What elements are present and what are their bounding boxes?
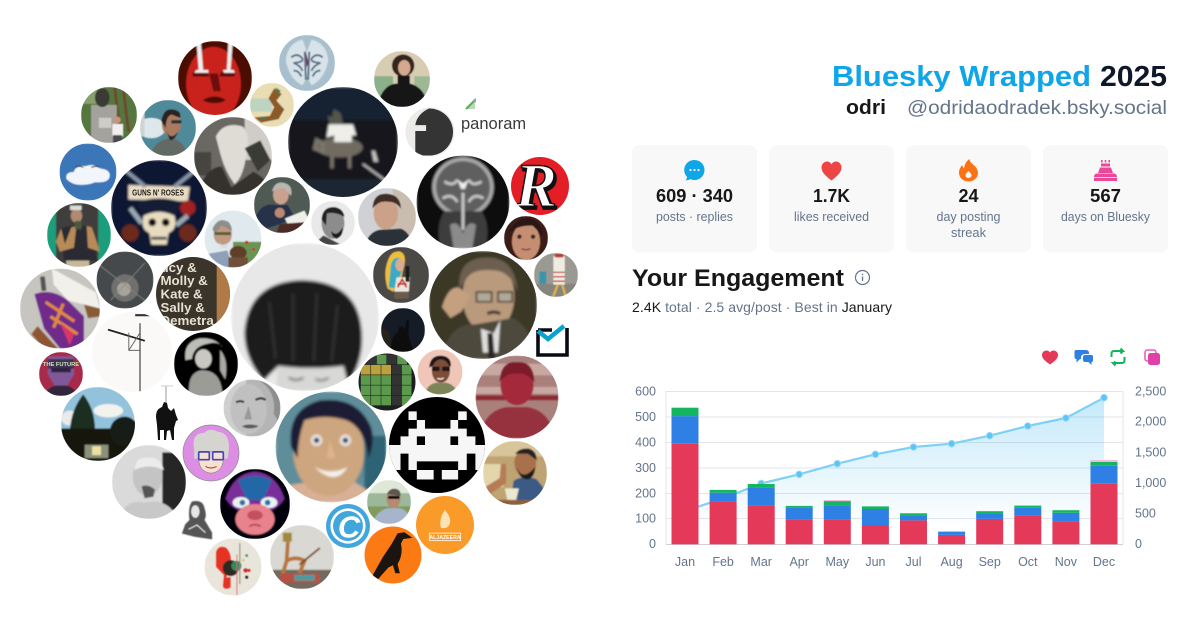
avatar: sailor toy on shelf (534, 253, 578, 297)
icon: info (856, 270, 870, 284)
avatar: night silhouette (381, 308, 425, 352)
avatar: woman in patterned dress (20, 268, 100, 348)
cumulative area (685, 398, 1104, 544)
avatar: Lucy & Molly text sign (152, 257, 230, 331)
engagement summary text: 2.4K total · 2.5 avg/post · Best in January (632, 299, 892, 315)
reposts bars (672, 408, 1118, 516)
icon: heart (822, 162, 842, 180)
avatar: red face with light beams (178, 41, 252, 121)
left axis labels: 500 (635, 410, 656, 424)
right axis labels: 2,500 (1135, 384, 1166, 398)
avatar: Guns N' Roses skull logo (111, 160, 207, 256)
avatar: Don Quixote silhouette (156, 386, 178, 440)
avatar: man reading a book (254, 177, 310, 233)
avatar: antenna on white (108, 314, 150, 392)
avatar: brain illustration (279, 35, 335, 91)
avatar: Madonna with anarchy shirt (373, 247, 429, 303)
month labels: Jun (865, 555, 886, 569)
month labels: Dec (1093, 555, 1115, 569)
avatar: marble statue on black (174, 332, 238, 396)
panel: posts and replies: posts · replies (656, 210, 733, 224)
avatar: mirror selfie on green (47, 203, 111, 267)
left axis labels: 300 (635, 461, 656, 475)
legend icons (1042, 348, 1160, 366)
left axis labels: 100 (635, 512, 656, 526)
cumulative line (685, 398, 1104, 511)
panel: likes received: 1.7K (813, 186, 850, 206)
avatar cluster (20, 35, 578, 596)
avatar: Al Jazeera orange logo: ALJAZEERA (429, 535, 461, 541)
line points (758, 394, 1107, 487)
replies bars (672, 416, 1118, 535)
avatar: young man (358, 188, 416, 246)
avatar: Lucy & Molly text sign: Sally & (160, 300, 205, 315)
month labels: Sep (979, 555, 1001, 569)
broken image icon and alt text (461, 98, 526, 133)
icon: legend like (1042, 350, 1058, 364)
left axis labels (635, 384, 656, 551)
avatar: The Future cartoon (39, 352, 83, 396)
icon: flame (959, 159, 978, 182)
icon: legend repost (1112, 348, 1124, 366)
panel: posts and replies (632, 145, 757, 252)
avatar: Wordle grid (358, 354, 416, 410)
avatar: crow on orange (364, 526, 422, 584)
right axis labels (1135, 384, 1166, 551)
left axis labels: 200 (635, 486, 656, 500)
month labels: Apr (789, 555, 809, 569)
avatar: blue C logo: C (338, 509, 361, 544)
avatar: guitar sculpture (270, 525, 334, 589)
avatar: red-tinted boy photo (476, 356, 558, 438)
avatar: blonde woman black and white (224, 380, 280, 436)
avatar: space invader (389, 397, 485, 493)
avatar: blue C logo (326, 504, 370, 548)
avatar: red R logo: R (514, 150, 557, 220)
month labels: May (825, 555, 850, 569)
panel: posts and replies: 609 · 340 (656, 186, 733, 206)
month labels: Aug (940, 555, 963, 569)
right axis labels: 0 (1135, 537, 1142, 551)
avatar: man at monument (81, 87, 137, 143)
month labels (675, 555, 1115, 569)
panel: likes received (769, 145, 894, 252)
user name and handle: @odridaodradek.bsky.social (907, 98, 1167, 119)
avatar: Lucy & Molly text sign: Kate & (160, 286, 203, 301)
avatar: bearded man at restaurant (483, 441, 547, 505)
avatar: cartoon man on purple (183, 425, 239, 481)
avatar: yellow painting with dragon (250, 83, 294, 127)
panel: days on Bluesky: 567 (1090, 186, 1121, 206)
icon: checkbox logo (538, 326, 567, 355)
user name and handle: odri (846, 97, 886, 119)
avatar: man with sunglasses and sky (137, 100, 196, 156)
panel: days on Bluesky (1043, 145, 1168, 252)
chart: monthly engagement (635, 384, 1166, 569)
title: 2025 (1100, 61, 1167, 93)
avatar: red R logo: R (516, 153, 559, 223)
panel: day posting streak: streak (951, 226, 987, 240)
broken image icon and alt text: panoram (461, 115, 526, 133)
right axis labels: 1,500 (1135, 446, 1166, 460)
avatar: big smiling man (276, 392, 386, 502)
heading: Your Engagement: Your Engagement (632, 265, 844, 292)
avatar: abstract red shapes on cream (204, 538, 262, 596)
month labels: Jan (675, 555, 695, 569)
avatar: man with dog and poppies (204, 210, 262, 268)
stacked bars (672, 408, 1118, 544)
month labels: Mar (750, 555, 772, 569)
avatar: Spinoza engraving (182, 501, 212, 539)
avatar: big black-haired woman portrait (231, 243, 379, 391)
icon: cake (1094, 160, 1117, 181)
avatar: red R logo (511, 157, 569, 215)
avatar: letter f half circle logo (406, 108, 454, 156)
panel: day posting streak (906, 145, 1031, 252)
panel: likes received: likes received (794, 210, 869, 224)
avatar: masked pig cartoon (220, 469, 290, 539)
avatar: Magritte house and tree (61, 387, 139, 461)
right axis labels: 500 (1135, 506, 1156, 520)
avatar: bespectacled man from film (429, 251, 537, 359)
avatar: Lucy & Molly text sign: Demetra (160, 313, 214, 328)
avatar: The Future cartoon: THE FUTURE (43, 362, 79, 368)
quotes bars (824, 460, 1118, 501)
avatar: woman with glasses on pink (418, 350, 462, 394)
avatar: Lucy & Molly text sign: Lucy & (152, 260, 197, 275)
avatar: girl close-up face (504, 216, 548, 260)
panel: day posting streak: 24 (958, 186, 978, 206)
month labels: Jul (906, 555, 921, 569)
avatar: old man black and white (112, 445, 186, 519)
icon: chat bubble (684, 160, 705, 180)
avatar: cloud with eyes (60, 144, 116, 200)
icon: legend replies (1074, 350, 1093, 365)
title: Bluesky Wrapped (832, 61, 1091, 93)
right axis labels: 1,000 (1135, 476, 1166, 490)
likes bars (672, 443, 1118, 544)
panel: days on Bluesky: days on Bluesky (1061, 210, 1151, 224)
left axis labels: 400 (635, 436, 656, 450)
month labels: Nov (1055, 555, 1078, 569)
left axis labels: 0 (649, 537, 656, 551)
avatar: bald man black and white (311, 201, 355, 245)
avatar: dark grey ceiling (96, 252, 154, 308)
avatar: Lucy & Molly text sign: Molly & (160, 273, 208, 288)
grid lines (666, 392, 1123, 518)
month labels: Oct (1018, 555, 1038, 569)
panel: day posting streak: day posting (936, 210, 1001, 224)
month labels: Feb (712, 555, 734, 569)
avatar: Guns N' Roses skull logo: GUNS N' ROSES (132, 189, 184, 198)
right axis labels: 2,000 (1135, 414, 1166, 428)
avatar: Al Jazeera orange logo (416, 496, 474, 554)
avatar: grey haired portrait (194, 117, 272, 195)
left axis labels: 600 (635, 384, 656, 398)
avatar: MRI brain scan (416, 156, 510, 248)
avatar: dark scene with white animals (288, 87, 398, 201)
avatar: woman in black turtleneck (374, 51, 430, 107)
avatar: man in sunglasses outdoors (367, 480, 411, 524)
icon: legend quotes (1145, 350, 1160, 365)
